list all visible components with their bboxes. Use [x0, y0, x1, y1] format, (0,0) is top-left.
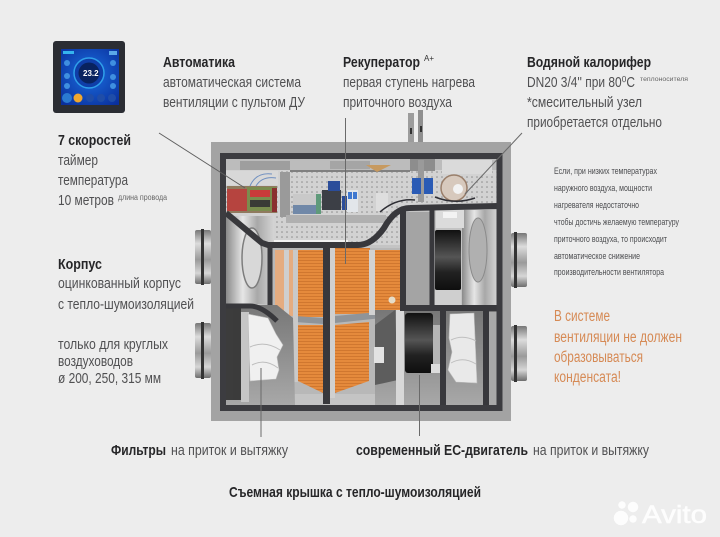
heading: speeds and timer: 10 метров: [58, 192, 114, 209]
heading: water heater: [527, 54, 688, 131]
heading: recuperator: Рекуператор: [343, 54, 420, 71]
icon: lower EC fan: [405, 313, 433, 373]
heading: water heater: DN20 3/4'' при 80⁰C: [527, 74, 635, 91]
icon: touchscreen remote control: [53, 41, 125, 113]
text block: heater note: производительности вентилятора: [554, 267, 665, 278]
text block: heater note: приточного воздуха, то происходит: [554, 234, 667, 245]
heading: recuperator: приточного воздуха: [343, 94, 453, 111]
heading: housing: Корпус: [58, 256, 102, 273]
grey bypass panel: [405, 212, 431, 306]
text block: heater note: [554, 166, 679, 278]
arrow: water heater leader: [465, 133, 522, 194]
heading: water heater: приобретается отдельно: [527, 114, 662, 131]
icon: right duct connections: [511, 232, 527, 382]
icon: breakers and contactors: [293, 181, 358, 214]
heading: speeds and timer: [58, 132, 167, 209]
heading: speeds and timer: таймер: [58, 152, 98, 169]
heading: housing: [58, 256, 194, 313]
text block: heater note: Если, при низких температурах: [554, 166, 657, 177]
label: filters: [111, 442, 288, 459]
arrow: automation leader: [159, 133, 245, 188]
callout: condensate warning: В системе: [554, 308, 610, 325]
duct opening left: [242, 228, 262, 288]
heading: housing: с тепло-шумоизоляцией: [58, 296, 194, 313]
panel: heat exchanger: [271, 246, 402, 404]
heading: water heater: Водяной калорифер: [527, 54, 651, 71]
dark internal partitions: [226, 206, 498, 405]
callout: condensate warning: образовываться: [554, 349, 643, 366]
heading: recuperator: A+: [424, 54, 434, 63]
text block: heater note: нагревателя недостаточно: [554, 200, 639, 211]
icon: upper EC fan: [435, 230, 461, 290]
icon: red control board: [227, 174, 277, 213]
label: filters: Фильтры: [111, 442, 166, 459]
unit housing: [211, 142, 511, 421]
text block: round ducts: ø 200, 250, 315 мм: [58, 370, 161, 387]
heading: recuperator: первая ступень нагрева: [343, 74, 476, 91]
heading: water heater: теплоносителя: [640, 76, 688, 83]
insulated frame: [223, 156, 500, 408]
arrow: filters leader: [260, 368, 262, 437]
icon: right air filter: [448, 313, 477, 383]
callout: condensate warning: конденсата!: [554, 369, 621, 386]
icon: watermark logo: Avito: [642, 501, 707, 529]
label: EC motor: современный ЕС-двигатель: [356, 442, 528, 459]
text block: heater note: наружного воздуха, мощности: [554, 183, 652, 194]
text block: round ducts: воздуховодов: [58, 353, 133, 370]
heading: speeds and timer: длина провода: [118, 193, 167, 202]
text block: heater note: автоматическое снижение: [554, 251, 640, 262]
label: filters: на приток и вытяжку: [171, 442, 288, 459]
heading: water heater: *смесительный узел: [527, 94, 642, 111]
label: removable lid: Съемная крышка с тепло-шумоизоляцией: [229, 484, 481, 501]
left fan chamber: [226, 216, 274, 304]
callout: condensate warning: вентиляции не должен: [554, 329, 682, 346]
upper service compartment: [226, 159, 497, 245]
icon: heater water pipes: [408, 110, 423, 143]
heading: housing: оцинкованный корпус: [58, 275, 181, 292]
interior background: [224, 157, 498, 407]
lower left chamber with filter: [226, 305, 295, 405]
panel: ventilation unit cutaway: [211, 142, 511, 421]
icon: left duct connections: [195, 229, 211, 379]
icon: touchscreen remote control: 23.2: [83, 69, 99, 78]
heading: automation: [163, 54, 305, 111]
heading: speeds and timer: 7 скоростей: [58, 132, 131, 149]
heading: automation: Автоматика: [163, 54, 236, 71]
heading: automation: вентиляции с пультом ДУ: [163, 94, 305, 111]
heading: automation: автоматическая система: [163, 74, 302, 91]
icon: left air filter: [248, 314, 283, 381]
icon: terminals and transformer: [380, 175, 475, 212]
text block: round ducts: [58, 336, 168, 387]
label: EC motor: на приток и вытяжку: [533, 442, 649, 459]
arrow: motor leader: [418, 375, 420, 436]
heading: speeds and timer: температура: [58, 172, 129, 189]
callout: condensate warning: [554, 308, 682, 386]
upper right chamber with fan: [433, 208, 497, 305]
icon: watermark logo: [614, 501, 707, 529]
heading: recuperator: [343, 54, 476, 111]
text block: round ducts: только для круглых: [58, 336, 168, 353]
arrow: recuperator leader: [344, 118, 346, 264]
lower right chamber with fan and filter: [374, 296, 497, 405]
